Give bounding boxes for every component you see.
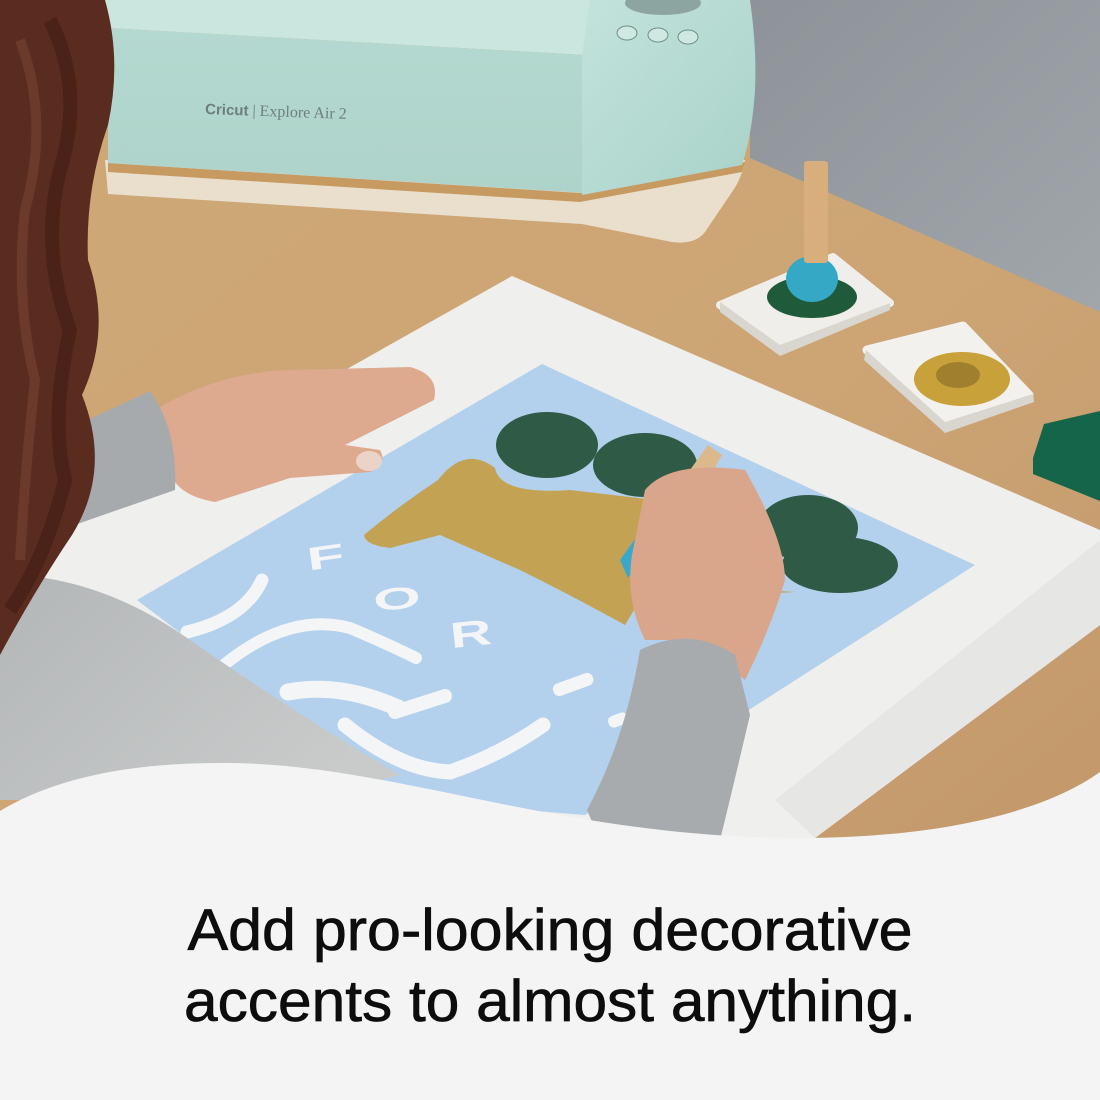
- machine lid: [105, 0, 597, 55]
- bottom wave panel: [0, 763, 1100, 1100]
- desk surface: [0, 0, 1100, 850]
- blue stencil area: [137, 364, 975, 815]
- body in grey top: [0, 575, 400, 800]
- machine dial: [625, 0, 701, 15]
- canvas: [0, 276, 1100, 838]
- machine front: [108, 28, 585, 193]
- headline: accents to almost anything.: [184, 969, 916, 1034]
- cutting machine: [105, 0, 755, 243]
- machine side: [582, 0, 755, 195]
- hair strands: [10, 20, 70, 610]
- brush handle and sponge: [620, 445, 722, 578]
- stencil script: [187, 580, 543, 772]
- hair: [0, 0, 114, 655]
- thumbnail: [356, 451, 382, 471]
- gold paint daub: [364, 459, 795, 625]
- paint tray: gold: [864, 326, 1034, 433]
- right sleeve: [587, 639, 750, 840]
- stencil lettering: R: [448, 613, 494, 656]
- right hand: [630, 468, 785, 680]
- wall: [750, 0, 1100, 312]
- stencil lettering: F: [305, 537, 347, 578]
- stencil lettering: O: [371, 579, 422, 618]
- stencil lettering: [305, 537, 629, 729]
- headline: Add pro-looking decorative: [188, 898, 912, 963]
- machine base: [105, 160, 745, 243]
- left hand: [158, 367, 435, 502]
- green book: [1033, 411, 1100, 501]
- paint tray: green: [720, 161, 890, 356]
- machine brand label: Cricut | Explore Air 2: [205, 101, 347, 123]
- headline: [184, 898, 916, 1034]
- wood trim: [108, 162, 745, 202]
- machine buttons: [617, 26, 698, 44]
- green paint daubs: [496, 412, 898, 593]
- left sleeve: [45, 391, 175, 530]
